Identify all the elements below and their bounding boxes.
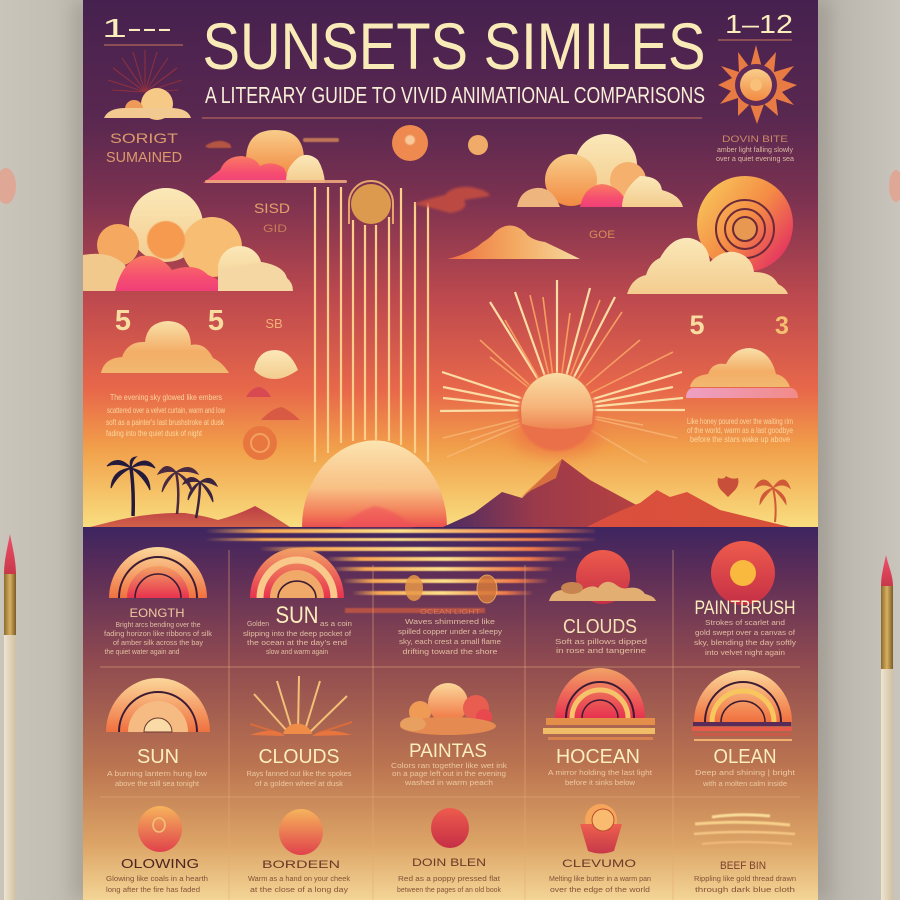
icon: ember bowl: [580, 804, 622, 854]
panel: row 3 column 4: [549, 804, 651, 894]
icon: falling sun: [349, 181, 393, 224]
text block: above the still sea tonight: [115, 781, 199, 788]
text block: top left label: [106, 130, 182, 166]
text block: Waves shimmered like: [405, 619, 495, 626]
icon: cloud 6: [254, 350, 298, 379]
heading: OLOWING: [121, 856, 199, 871]
icon: striped arc: [692, 670, 792, 741]
text block: top right note: [716, 134, 794, 163]
text block: Golden: [247, 621, 269, 628]
icon: small orb: [243, 426, 277, 460]
text block: Strokes of scarlet and: [705, 620, 785, 627]
icon: spiral sun: [697, 176, 793, 272]
panel: lower grid background: [83, 527, 818, 900]
text block: left number: SB: [265, 316, 283, 331]
text block: left number: [115, 305, 283, 337]
icon: small cloud top left: [104, 88, 191, 120]
heading: EONGTH: [130, 606, 184, 620]
text block: A mirror holding the last light: [548, 770, 652, 777]
text block: slow and warm again: [266, 649, 328, 656]
text block: left number: 5: [208, 305, 224, 337]
heading: HOCEAN: [556, 746, 640, 768]
icon: cloud 4: [627, 238, 788, 294]
icon: reflected orb left: [405, 575, 423, 601]
panel: row 2 column 5: [692, 670, 795, 788]
shell right: [889, 170, 900, 202]
icon: palm tree medium: [158, 466, 198, 514]
text block: in rose and tangerine: [556, 648, 646, 655]
text block: Rays fanned out like the spokes: [246, 771, 352, 778]
text block: on a page left out in the evening: [392, 771, 506, 778]
reflection stripes: [205, 529, 595, 613]
icon: small palm: [718, 476, 738, 497]
text block: Warm as a hand on your cheek: [248, 876, 351, 883]
text block: [248, 876, 351, 894]
text block: top right note: over a quiet evening sea: [716, 156, 794, 163]
title: SUNSETS SIMILES: [202, 9, 706, 83]
text block: left paragraph: soft as a painter's last brushstroke at dusk: [106, 418, 225, 427]
text block: right paragraph: Like honey poured over the waiting rim: [687, 417, 793, 426]
text block: small central label: SISD: [254, 200, 290, 216]
text block: [555, 639, 647, 655]
panel: row 1 column 3: [398, 575, 503, 656]
icon: wave lines: [694, 815, 795, 844]
icon: firework burst: [108, 50, 182, 92]
text block: of amber silk across the bay: [113, 640, 204, 647]
icon: rainbow 2: [250, 548, 344, 598]
text block: Glowing like coals in a hearth: [106, 876, 208, 883]
text block: fading horizon like ribbons of silk: [104, 631, 213, 638]
text block: top right note: DOVIN BITE: [722, 134, 788, 144]
text block: right number: 5: [689, 310, 705, 340]
icon: red sun: [711, 541, 775, 605]
panel: row 1 column 4: [549, 550, 656, 655]
icon: left hills: [90, 506, 290, 527]
heading: CLEVUMO: [562, 858, 637, 870]
text block: [694, 876, 796, 894]
icon: cloud stack: [400, 683, 496, 735]
heading: OLEAN: [714, 746, 776, 768]
icon: sun badge: [718, 45, 797, 124]
text block: Melting like butter in a warm pan: [549, 876, 651, 883]
icon: rainbow 1: [109, 547, 207, 598]
text block: Bright arcs bending over the: [116, 622, 201, 629]
text block: [107, 771, 208, 788]
text block: [695, 770, 795, 788]
text block: the ocean at the day's end: [247, 640, 347, 647]
text block: over the edge of the world: [550, 887, 650, 894]
text block: small central label: [254, 200, 290, 235]
text block: OCEAN LIGHT: [420, 609, 481, 616]
heading: PAINTAS: [409, 741, 487, 762]
text block: with a molten calm inside: [702, 781, 787, 788]
panel: row 2 column 1: [106, 678, 210, 788]
text block: long after the fire has faded: [106, 887, 200, 894]
text block: right paragraph: [687, 417, 793, 444]
icon: sun behind clouds: [549, 550, 656, 604]
text block: [391, 763, 508, 787]
text block: [104, 622, 213, 656]
icon: palm tree large: [107, 457, 155, 516]
panel: row 2 column 3: [391, 683, 508, 787]
text block: [243, 621, 352, 656]
icon: small wedge cloud: [261, 407, 300, 420]
text block: [246, 771, 352, 788]
text block: right number: 3: [775, 312, 789, 340]
icon: orb 1: [392, 125, 428, 161]
icon: cloud 3: [447, 226, 580, 259]
corner number left: 1---: [102, 13, 172, 43]
heading: CLOUDS: [563, 616, 637, 638]
text block: sky, blending the day softly: [694, 640, 797, 647]
text block: small right label: GOE: [589, 229, 615, 241]
text block: left number: 5: [115, 305, 131, 337]
icon: amber orb: [279, 809, 323, 855]
text block: top left label: SUMAINED: [106, 149, 182, 166]
panel: row 3 column 2: [248, 809, 351, 894]
light rays columns: [315, 187, 428, 462]
icon: small pink cloud: [246, 387, 271, 397]
panel: row 2 column 4: [543, 668, 655, 787]
text block: small central label: GID: [263, 223, 287, 235]
text block: slipping into the deep pocket of: [243, 631, 351, 638]
panel: row 1 column 1: [104, 547, 213, 656]
icon: palm tree small: [183, 477, 217, 518]
icon: palm tree right: [755, 480, 790, 522]
text block: as a coin: [320, 621, 352, 628]
heading: CLOUDS: [258, 746, 340, 768]
icon: orb 2: [468, 135, 488, 155]
text block: into velvet night again: [705, 650, 785, 657]
text block: A burning lantern hung low: [107, 771, 208, 778]
text block: [694, 620, 797, 657]
shell left: [0, 168, 16, 204]
panel: row 3 column 5: [694, 815, 796, 894]
text block: top left label: SORIGT: [110, 130, 179, 146]
text block: between the pages of an old book: [397, 887, 501, 894]
panel: row 1 column 2: [243, 548, 352, 656]
icon: mountains: [443, 459, 790, 527]
icon: cloud 1: [203, 130, 347, 183]
text block: right number: [689, 310, 789, 340]
icon: cloud 2: [517, 134, 683, 207]
heading: BEEF BIN: [720, 860, 766, 872]
text block: [398, 609, 503, 656]
text block: top right note: amber light falling slowly: [717, 147, 793, 154]
text block: at the close of a long day: [250, 887, 349, 894]
text block: Colors ran together like wet ink: [391, 763, 508, 770]
text block: spilled copper under a sleepy: [398, 629, 503, 636]
icon: rainbow 3: [106, 678, 210, 732]
grid lines: [100, 550, 800, 900]
icon: crimson orb: [431, 808, 469, 848]
icon: reflected orb right: [477, 575, 497, 603]
text block: washed in warm peach: [404, 780, 493, 787]
text block: sky, each crest a small flame: [399, 639, 501, 646]
text block: Red as a poppy pressed flat: [398, 876, 500, 883]
heading: BORDEEN: [262, 859, 340, 871]
text block: left paragraph: scattered over a velvet curtain, warm and low: [107, 406, 225, 415]
text block: right paragraph: before the stars wake up above: [690, 435, 790, 444]
icon: large cloud left: [83, 188, 293, 291]
panel: row 3 column 3: [397, 808, 501, 894]
text block: [106, 876, 208, 894]
panel: row 1 column 5: [694, 541, 797, 657]
panel: row 2 column 2: [246, 676, 352, 788]
text block: right paragraph: of the world, warm as a last goodbye: [687, 426, 793, 435]
corner number right: 1–12: [725, 9, 793, 39]
bright rays: [440, 280, 685, 411]
heading: SUN: [137, 746, 179, 768]
heading: DOIN BLEN: [412, 857, 486, 869]
text block: of a golden wheel at dusk: [255, 781, 344, 788]
text block: through dark blue cloth: [695, 887, 795, 894]
text block: Soft as pillows dipped: [555, 639, 647, 646]
text block: left paragraph: [106, 393, 225, 438]
icon: wisp cloud: [414, 187, 490, 213]
heading: PAINTBRUSH: [694, 598, 796, 619]
icon: cloud 7: [686, 348, 798, 398]
paintbrush right: [881, 555, 893, 900]
text block: [548, 770, 652, 787]
text block: left paragraph: The evening sky glowed like embers: [110, 393, 222, 402]
icon: radiant sun with rays: [440, 280, 685, 463]
text block: [397, 876, 501, 894]
icon: striped rainbow: [543, 668, 655, 740]
heading: SUN: [276, 602, 318, 629]
text block: before it sinks below: [565, 780, 636, 787]
icon: setting sun: [302, 440, 447, 527]
text block: drifting toward the shore: [402, 649, 498, 656]
icon: cloud 5: [101, 321, 229, 373]
panel: upper sunset scene: [83, 0, 818, 528]
icon: sunburst: [250, 676, 352, 736]
text block: [549, 876, 651, 894]
text block: Rippling like gold thread drawn: [694, 876, 796, 883]
text block: Deep and shining | bright: [695, 770, 795, 777]
subtitle: A LITERARY GUIDE TO VIVID ANIMATIONAL COMPARISONS: [205, 82, 705, 108]
text block: left paragraph: fading into the quiet dusk of night: [106, 429, 203, 438]
text block: the quiet water again and: [104, 649, 180, 656]
panel: row 3 column 1: [106, 806, 208, 894]
icon: glowing orb: [138, 806, 182, 852]
paintbrush left: [4, 534, 16, 900]
text block: gold swept over a canvas of: [695, 630, 795, 637]
